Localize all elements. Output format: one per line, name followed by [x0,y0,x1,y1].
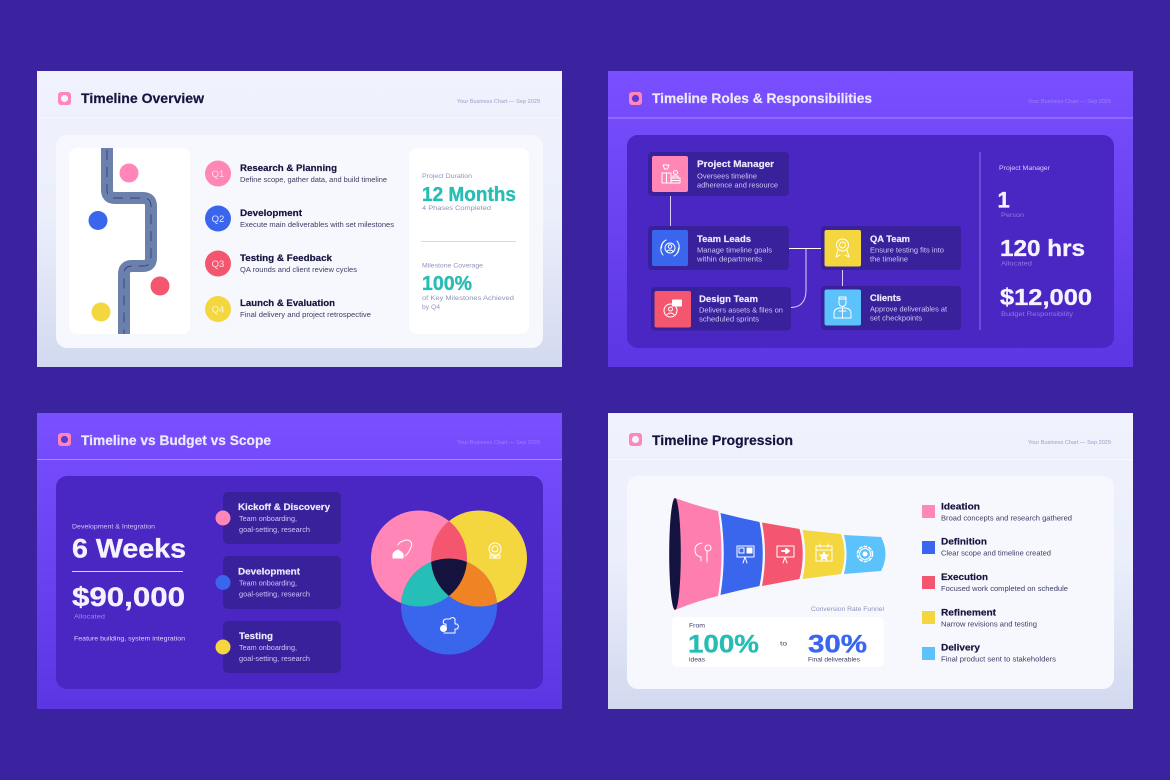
legend: definition [922,536,1051,558]
stage: kickoff and discovery [216,492,341,544]
project manager stats: Project Manager [999,165,1051,172]
legend: ideation [922,502,1072,522]
icon: scope head [393,540,412,558]
phase Q1: Q1 [212,169,224,180]
role: team leads: Manage timeline goals [697,248,773,254]
budget stats: $90,000 [72,582,185,612]
heading: Timeline Progression [652,433,793,448]
phase Q3: Q3 [212,259,224,270]
legend: execution [922,572,1068,593]
stage: testing [216,621,341,673]
conversion stats: to [780,640,787,648]
phase Q4: Q4 [212,304,224,316]
stage: development: Development [238,566,301,578]
stage: kickoff and discovery: Team onboarding, [239,516,297,523]
content card [56,135,543,348]
panel: timeline overview [37,71,562,367]
content card [627,135,1114,348]
stage: testing: Team onboarding, [239,645,297,652]
stage: testing: Testing [239,631,273,642]
role: clients: Clients [870,293,901,304]
stats card: 100% [422,273,472,295]
icon: award ribbon [836,239,849,257]
stats card: Milestone Coverage [422,262,483,270]
panel: timeline vs budget vs scope [37,413,562,709]
legend: refinement [922,608,1037,628]
date label: Your Business Chart — Sep 2029 [1028,99,1111,105]
conversion stats: From [689,622,705,630]
legend: execution: Focused work completed on schedule [941,586,1068,593]
legend: refinement: Refinement [941,608,997,618]
stats card: by Q4 [422,304,440,311]
legend: ideation: Broad concepts and research gathered [941,516,1072,522]
icon: target person [661,240,679,256]
phase Q3: QA rounds and client review cycles [240,267,358,274]
phase Q1: Research & Planning [240,163,337,174]
role: clients: Approve deliverables at [870,306,947,314]
date label: Your Business Chart — Sep 2029 [457,440,540,446]
stage: kickoff and discovery: goal-setting, research [239,527,310,534]
role: project manager: adherence and resource [697,182,778,190]
project manager stats: Person [1001,212,1024,219]
icon: delivery gear [858,546,872,562]
date label: Your Business Chart — Sep 2029 [457,99,540,105]
phase Q2: Q2 [212,214,224,225]
icon: budget puzzle [440,618,458,633]
panel: roles and responsibilities [608,71,1133,367]
road map [69,148,190,334]
role: qa team: the timeline [870,256,908,264]
icon: client person [834,297,851,318]
icon: definition board [737,546,754,563]
project manager stats: Budget Responsibility [1001,311,1074,318]
legend: delivery: Final product sent to stakeholders [941,656,1057,664]
funnel chart [669,498,886,610]
icon: header badge [629,92,642,105]
phase Q4 [205,296,371,322]
stats card: Project Duration [422,173,472,180]
role: team leads: Team Leads [697,234,751,245]
legend: delivery [922,642,1057,664]
role: design team [651,287,791,330]
venn diagram [371,510,527,654]
icon: timeline flower [489,543,501,558]
phase Q2 [205,206,395,232]
conversion stats: ideas [689,656,706,664]
heading: Timeline vs Budget vs Scope [81,433,271,448]
stage: testing: goal-setting, research [239,656,310,663]
chart caption: Conversion Rate Funnel [811,606,885,613]
phase Q2: Development [240,208,303,219]
legend: execution: Execution [941,572,988,583]
role: design team: Delivers assets & files on [699,308,783,314]
legend: refinement: Narrow revisions and testing [941,622,1037,628]
phase Q4: Final delivery and project retrospective [240,312,371,319]
role: team leads [648,226,789,270]
role: design team: Design Team [699,294,758,305]
panel: timeline progression [608,413,1133,709]
icon: header badge [58,92,71,105]
icon: refinement calendar [816,544,832,561]
phase Q1 [205,160,387,186]
conversion stats: 100% [688,630,759,658]
icon: person with chat bubble [664,304,677,317]
stage: development: Team onboarding, [239,580,297,588]
phase Q3 [205,250,358,276]
project manager stats [998,165,1092,318]
role: qa team [821,226,961,270]
icon: execution board [777,546,794,563]
heading: Timeline Overview [81,91,205,106]
icon: manager at desk [662,165,680,183]
role: qa team: Ensure testing fits into [870,248,944,254]
role: clients: set checkpoints [870,316,923,322]
role: qa team: QA Team [870,234,910,245]
date label: Your Business Chart — Sep 2029 [1028,440,1111,446]
stage: kickoff and discovery: Kickoff & Discovery [238,502,331,513]
legend: delivery: Delivery [941,642,981,654]
budget stats: 6 Weeks [72,534,186,564]
conversion stats: 30% [808,630,867,658]
icon: header badge [629,433,642,446]
phase Q3: Testing & Feedback [240,253,333,264]
phase Q4: Launch & Evaluation [240,298,335,309]
stats card: 12 Months [422,184,516,206]
role: project manager: Oversees timeline [697,174,757,180]
stats card: 4 Phases Completed [422,205,491,212]
role: project manager: Project Manager [697,159,774,170]
budget stats: Development & Integration [72,524,155,530]
role: design team: scheduled sprints [699,316,760,324]
connectors [670,196,842,308]
legend: definition: Clear scope and timeline created [941,550,1051,558]
project manager stats: Allocated [1001,260,1032,268]
icon: header badge [58,433,71,446]
stats card [409,148,529,334]
icon: ideation head [695,543,711,562]
conversion stats: Final deliverables [808,656,861,664]
content card [627,476,1114,689]
budget stats: Feature building, system integration [74,636,185,642]
stage: development: goal-setting, research [239,592,310,598]
budget stats: Allocated [74,614,105,620]
project manager stats: 1 [998,188,1010,212]
project manager stats: $12,000 [1000,284,1092,310]
role: team leads: within departments [696,256,763,264]
project manager stats: 120 hrs [1000,235,1085,261]
role: clients [821,286,961,330]
role: project manager [648,152,789,196]
content card [56,476,543,689]
legend: definition: Definition [941,536,987,548]
conversion stats [672,617,884,667]
heading: Timeline Roles & Responsibilities [652,91,872,106]
legend: ideation: Ideation [941,502,980,512]
budget stats [72,524,186,642]
phase Q1: Define scope, gather data, and build timeline [240,177,387,184]
stats card: of Key Milestones Achieved [422,295,514,302]
phase Q2: Execute main deliverables with set milestones [240,222,395,229]
stage: development [216,556,341,609]
